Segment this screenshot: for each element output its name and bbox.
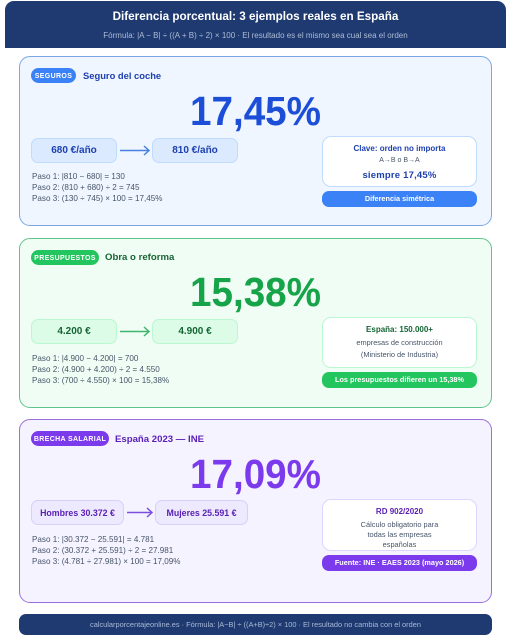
value A: 4.200 € bbox=[57, 326, 91, 337]
regulation note box bbox=[322, 499, 477, 551]
value B: 4.900 € bbox=[178, 326, 212, 337]
calculation steps: Paso 3: (130 ÷ 745) × 100 = 17,45% bbox=[32, 194, 162, 203]
note result: siempre 17,45% bbox=[362, 170, 437, 181]
value A bbox=[31, 138, 117, 163]
note detail bbox=[361, 520, 438, 549]
calculation steps bbox=[32, 172, 162, 203]
note heading: Clave: orden no importa bbox=[353, 144, 446, 153]
note detail: empresas de construcción bbox=[356, 338, 443, 347]
panel background bbox=[19, 56, 492, 226]
note heading: España: 150.000+ bbox=[366, 325, 433, 334]
footer bar bbox=[19, 614, 492, 635]
value B bbox=[152, 138, 238, 163]
calculation steps: Paso 2: (4.900 + 4.200) ÷ 2 = 4.550 bbox=[32, 365, 160, 374]
title: Diferencia porcentual: 3 ejemplos reales en España bbox=[113, 10, 398, 22]
panel: brecha salarial bbox=[19, 419, 492, 603]
value B bbox=[155, 500, 248, 525]
note detail: Cálculo obligatorio para bbox=[361, 520, 438, 529]
panel background bbox=[19, 238, 492, 408]
calculation steps: Paso 2: (30.372 + 25.591) ÷ 2 = 27.981 bbox=[32, 546, 173, 555]
badge: presupuestos: PRESUPUESTOS bbox=[34, 255, 96, 262]
badge: brecha salarial: BRECHA SALARIAL bbox=[34, 436, 106, 443]
tag: fuente bbox=[322, 555, 477, 571]
big percentage: 17,45% bbox=[190, 88, 321, 134]
arrow bbox=[120, 146, 150, 156]
badge: seguros: SEGUROS bbox=[35, 73, 72, 80]
panel: seguro del coche bbox=[19, 56, 492, 226]
arrow bbox=[127, 508, 153, 518]
note detail bbox=[356, 338, 443, 359]
big percentage: 17,09% bbox=[190, 451, 321, 497]
value A bbox=[31, 500, 124, 525]
big percentage: 15,38% bbox=[190, 269, 321, 315]
value B: 810 €/año bbox=[172, 145, 218, 156]
note detail: (Ministerio de Industria) bbox=[361, 350, 438, 359]
context note box bbox=[322, 317, 477, 368]
calculation steps: Paso 1: |810 − 680| = 130 bbox=[32, 172, 125, 181]
badge: seguros bbox=[31, 68, 76, 83]
calculation steps: Paso 2: (810 + 680) ÷ 2 = 745 bbox=[32, 183, 140, 192]
panel: obra o reforma bbox=[19, 238, 492, 408]
arrow bbox=[120, 326, 150, 336]
panel heading: Seguro del coche bbox=[83, 70, 161, 81]
tag: presupuestos difieren bbox=[322, 372, 477, 388]
badge: brecha salarial bbox=[31, 431, 109, 446]
value A: Hombres 30.372 € bbox=[40, 508, 115, 518]
tag: diferencia simétrica bbox=[322, 191, 477, 207]
badge: presupuestos bbox=[31, 250, 99, 265]
note detail: A→B o B→A bbox=[379, 157, 420, 164]
value B bbox=[152, 319, 238, 344]
value A bbox=[31, 319, 117, 344]
key note box bbox=[322, 136, 477, 187]
panel heading: España 2023 — INE bbox=[115, 434, 204, 444]
tag: presupuestos difieren: Los presupuestos difieren un 15,38% bbox=[335, 375, 464, 384]
calculation steps bbox=[32, 354, 169, 385]
tag: fuente: Fuente: INE · EAES 2023 (mayo 2026) bbox=[335, 558, 464, 567]
calculation steps: Paso 3: (700 ÷ 4.550) × 100 = 15,38% bbox=[32, 376, 169, 385]
panel heading: Obra o reforma bbox=[105, 252, 174, 262]
note detail: españolas bbox=[383, 540, 416, 549]
footer bar: calcularporcentajeonline.es · Fórmula: |A−B| ÷ ((A+B)÷2) × 100 · El resultado no cambia con el orden bbox=[90, 620, 421, 629]
panel background bbox=[19, 419, 492, 603]
formula subtitle: Fórmula: |A − B| ÷ ((A + B) ÷ 2) × 100 · El resultado es el mismo sea cual sea el orden bbox=[103, 31, 408, 40]
calculation steps: Paso 1: |4.900 − 4.200| = 700 bbox=[32, 354, 138, 363]
calculation steps: Paso 1: |30.372 − 25.591| = 4.781 bbox=[32, 535, 154, 544]
value A: 680 €/año bbox=[51, 145, 97, 156]
calculation steps bbox=[32, 535, 180, 566]
header banner bbox=[5, 1, 506, 48]
note detail: todas las empresas bbox=[367, 530, 432, 539]
note heading: RD 902/2020 bbox=[376, 507, 423, 516]
calculation steps: Paso 3: (4.781 ÷ 27.981) × 100 = 17,09% bbox=[32, 557, 180, 566]
value B: Mujeres 25.591 € bbox=[167, 508, 236, 518]
tag: diferencia simétrica: Diferencia simétrica bbox=[365, 194, 434, 203]
